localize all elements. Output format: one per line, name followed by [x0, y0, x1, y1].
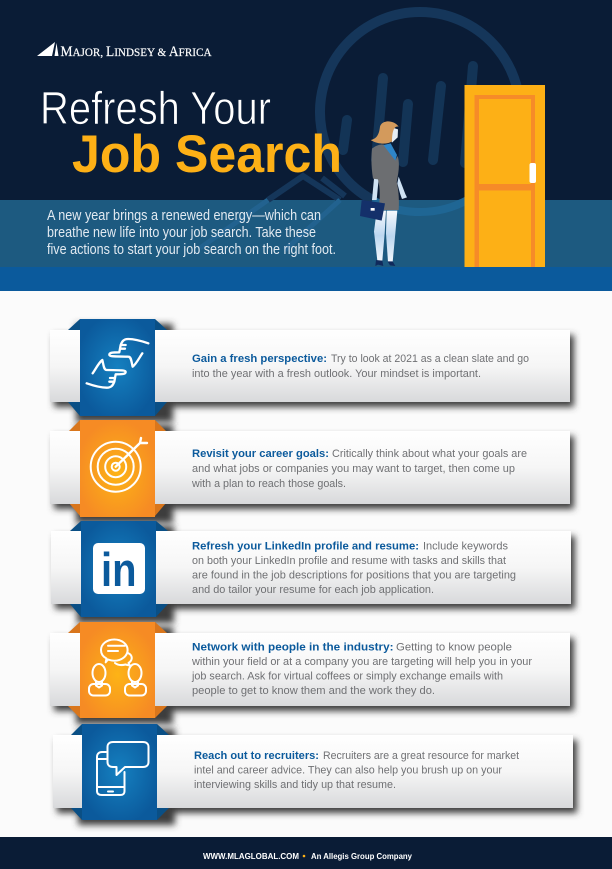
step 3 text: Include keywords	[423, 540, 508, 552]
step 1 text: Gain a fresh perspective:	[192, 353, 327, 365]
step 4 text: people to get to know them and the work they do.	[192, 685, 435, 697]
step 4 text	[191, 642, 532, 697]
step 4 text: Network with people in the industry:	[192, 642, 394, 654]
step 4 text: Getting to know people	[396, 642, 512, 654]
icon: linkedin: in	[101, 543, 136, 596]
step 3 text: are found in the job descriptions for positions that you are targeting	[192, 570, 516, 582]
step 4: network with people in the industry	[50, 622, 574, 724]
step 5 text	[194, 750, 519, 791]
step 1: gain a fresh perspective	[50, 319, 574, 422]
step 5 text: intel and career advice. They can also help you brush up on your	[194, 764, 502, 776]
illustration: woman with briefcase	[360, 121, 407, 266]
step 2 text: with a plan to reach those goals.	[191, 478, 346, 490]
step 5 text: interviewing skills and tidy up that resume.	[194, 779, 396, 791]
step 1 text: into the year with a fresh outlook. Your mindset is important.	[192, 368, 481, 380]
step 2 text: Revisit your career goals:	[192, 448, 329, 460]
illustration: orange door	[464, 85, 545, 267]
icon: phone with speech bubble	[97, 742, 148, 795]
footer	[0, 837, 612, 869]
footer: WWW.MLAGLOBAL.COM	[203, 851, 299, 861]
intro text: A new year brings a renewed energy—which can	[47, 208, 321, 224]
header background	[0, 0, 612, 291]
step 3 text: and do tailor your resume for each job application.	[192, 584, 434, 596]
step 2 text	[191, 448, 527, 490]
intro text: breathe new life into your job search. Take these	[47, 225, 316, 241]
icon: background magnifying glass	[200, 12, 520, 250]
footer: An Allegis Group Company	[311, 851, 412, 861]
logo: MAJOR, LINDSEY & AFRICA	[60, 44, 212, 60]
step 5 text: Recruiters are a great resource for market	[323, 750, 519, 762]
step 4 text: job search. Ask for virtual coffees or simply exchange emails with	[191, 670, 503, 682]
title	[40, 82, 342, 184]
icon: target with arrow	[91, 438, 147, 492]
step 1 text	[192, 353, 529, 380]
intro text	[47, 208, 336, 258]
title: Refresh Your	[40, 82, 271, 134]
step 3 text	[192, 540, 516, 596]
step 3: refresh linkedin profile and resume	[51, 521, 575, 623]
step 1 text: Try to look at 2021 as a clean slate and go	[331, 353, 529, 365]
step 4 text: within your field or at a company you are targeting will help you in your	[191, 656, 532, 668]
step 5 text: Reach out to recruiters:	[194, 750, 319, 762]
step 3 text: on both your LinkedIn profile and resume with tasks and skills that	[192, 555, 506, 567]
step 2: revisit your career goals	[50, 420, 574, 523]
icon: people chatting	[89, 640, 146, 696]
icon: hands framing	[87, 339, 148, 388]
intro text: five actions to start your job search on the right foot.	[47, 242, 336, 258]
step 2 text: Critically think about what your goals are	[332, 448, 527, 460]
step 2 text: and what jobs or companies you may want to target, then come up	[192, 463, 515, 475]
step 5: reach out to recruiters	[53, 724, 577, 825]
step 3 text: Refresh your LinkedIn profile and resume:	[192, 540, 419, 552]
title: Job Search	[72, 125, 342, 184]
